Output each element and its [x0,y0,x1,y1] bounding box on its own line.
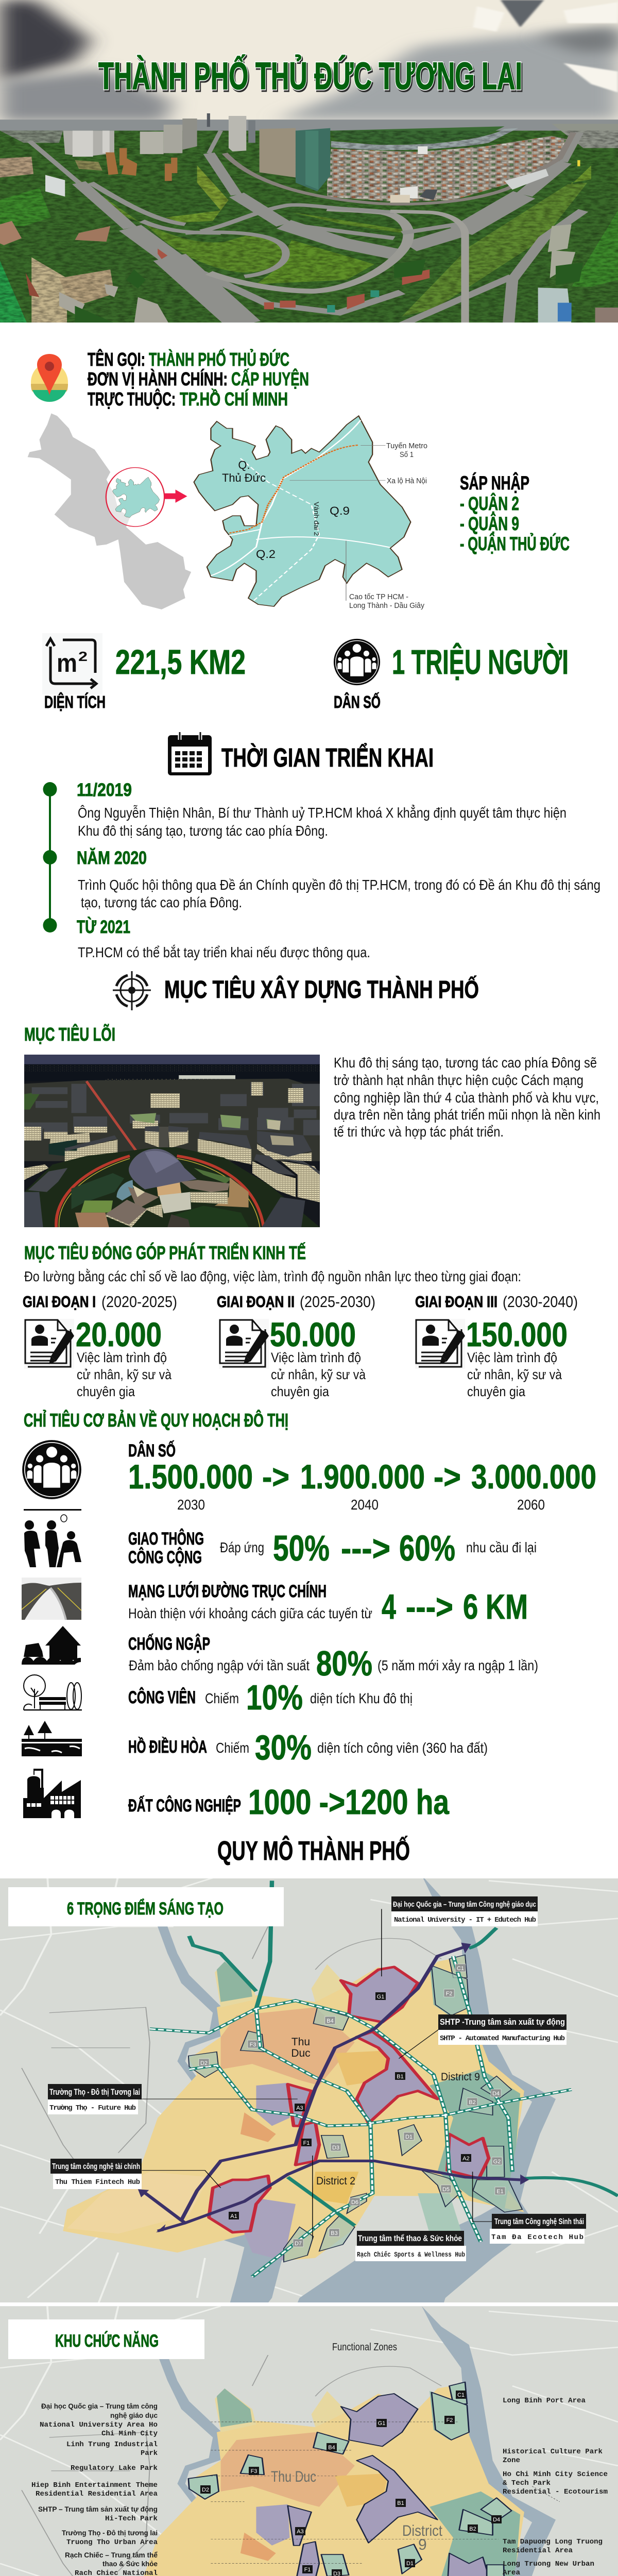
milestone 2021: TỪ 2021 [77,917,130,937]
target: public transport: CÔNG CỘNG [128,1547,202,1567]
target: flood control: 80% [316,1644,372,1683]
icon: park [24,1675,82,1710]
sandy lots [0,157,33,178]
heading: city scale: QUY MÔ THÀNH PHỐ [217,1836,410,1866]
callout: Rach Chiec: Trung tâm thể thao & Sức khỏe [358,2233,462,2243]
right labels: Tam Dapuong Long Truong [503,2538,603,2546]
leader lines [211,2422,560,2576]
map labels: Q.2 [256,548,276,561]
panel: phase I: 20.000 [76,1315,162,1353]
icon: calendar [168,732,212,775]
zone code tags: B4 [327,2018,334,2024]
zone code tags: A1 [230,2213,237,2219]
zone code tags: D4 [493,2517,500,2523]
right labels: Residential Area [503,2547,573,2555]
callout: Tam Da [490,2214,586,2244]
panel: phase I: GIAI ĐOẠN I [23,1293,96,1311]
milestone 2020 [77,848,600,910]
milestone 2020: NĂM 2020 [77,848,147,868]
icon: map pin [31,354,68,402]
map captions: District [402,2522,443,2539]
target: regulating lakes: 30% [255,1728,312,1767]
merged districts list: - QUẬN THỦ ĐỨC [460,533,570,554]
map labels: Long Thành - Dầu Giây [349,601,424,610]
panel: phase III: cử nhân, kỹ sư và [467,1367,562,1382]
target: industrial land [128,1783,450,1822]
right labels: Zone [503,2456,520,2465]
highlight circle [106,468,164,527]
stat: population: DÂN SỐ [334,692,381,711]
zone code tags: D5 [442,2187,450,2193]
target: regulating lakes: Chiếm [216,1740,249,1756]
map labels: Cao tốc TP HCM - [349,592,408,601]
dense city [327,136,568,202]
zone code tags: A2 [462,2156,470,2162]
core goal paragraph [334,1055,600,1140]
left labels: Truong Tho Urban Area [66,2538,158,2547]
zone code tags: B2 [469,2526,476,2532]
zone code tags: D1 [406,2561,414,2567]
left labels: Residential Residential Area [36,2490,158,2498]
night render of the innovation city [24,1055,320,1227]
city facts: ĐƠN VỊ HÀNH CHÍNH: [88,368,228,389]
callout: Truong Tho: Trường Thọ - Future Hub [49,2104,136,2112]
low-rise buildings [26,273,40,297]
target: industrial land: ĐẤT CÔNG NGHIỆP [128,1795,241,1816]
callout: Fintech [50,2159,142,2189]
towers [63,131,114,157]
zone code tags: G2 [493,2159,501,2165]
left labels: Đại học Quốc gia – Trung tâm công [41,2402,158,2410]
merged districts list: - QUẬN 2 [460,493,519,514]
merged districts list [460,472,570,554]
map labels: Q.9 [330,504,350,517]
map labels: Thủ Đức [222,471,266,484]
map title: 6 hubs [8,1887,284,1926]
right labels [501,2397,610,2576]
zone code tags [200,2391,506,2576]
zone code tags: A3 [296,2105,303,2111]
icon: public transport [24,1509,81,1567]
zone code tags: D2 [202,2487,209,2493]
right labels: & Tech Park [503,2479,551,2487]
target: main road network [128,1582,528,1626]
right labels: Historical Culture Park [503,2448,603,2456]
left labels: thao & Sức khỏe [102,2560,158,2568]
mini district shape [112,477,160,517]
panel: phase II: 50.000 [270,1315,356,1353]
panel: phase III: Việc làm trình độ [467,1350,557,1365]
target: regulating lakes: diện tích công viên (360 ha đất) [317,1740,488,1756]
target: population: 1.900.000 [300,1458,425,1496]
zone code tags: B3 [331,2230,338,2236]
green areas [0,188,618,287]
hero aerial photo of the city [0,0,618,325]
province silhouette [28,413,191,609]
city facts: THÀNH PHỐ THỦ ĐỨC [149,348,289,370]
panel: phase II [217,1293,375,1399]
timeline [43,780,600,960]
map: functional zones [0,2306,618,2576]
map title: functional zones [8,2319,204,2359]
city facts: TP.HỒ CHÍ MINH [180,388,288,410]
zone code tags: B4 [328,2445,335,2451]
panel: phase III: (2030-2040) [503,1293,578,1311]
callout: Fintech: Trung tâm công nghệ tài chính [52,2162,140,2171]
callout: National University: National University - IT + Edutech Hub [394,1916,536,1924]
zone code tags: A3 [297,2529,304,2535]
zone code tags: E1 [496,2189,504,2195]
target: population: 3.000.000 [471,1458,596,1496]
panel: phase III: chuyên gia [467,1384,526,1399]
target: population: DÂN SỐ [128,1440,176,1461]
panel: phase II: GIAI ĐOẠN II [217,1293,295,1311]
river and island [331,128,518,150]
city facts: CẤP HUYỆN [231,368,309,389]
callout: Rach Chiec: Rạch Chiếc Sports & Wellness Hub [357,2250,465,2259]
zone code tags: B1 [397,2500,404,2506]
stat: area [44,643,246,711]
callout: Tam Da: Tam Đa Ecotech Hub [491,2233,583,2242]
target: population: 2040 [351,1497,379,1513]
zone code tags: D2 [200,2060,208,2066]
target: population: 2060 [517,1497,545,1513]
icon: factory [23,1769,81,1818]
secondary zones [188,1955,522,2262]
icon: flood protection [22,1626,81,1665]
zone code tags: F1 [303,2140,310,2146]
right labels: Residential - Ecotourism [503,2488,608,2496]
right labels: Ho Chi Minh City Science [503,2470,608,2479]
red arrow [164,489,187,503]
target: main road network: 4 [382,1587,396,1626]
city facts: TRỰC THUỘC: [88,388,176,410]
panel: phase II: chuyên gia [271,1384,330,1399]
target: population: 2030 [177,1497,205,1513]
callout: Truong Tho: Trường Thọ - Đô thị Tương lai [49,2087,140,2097]
panel: phase I: chuyên gia [77,1384,135,1399]
map title: functional zones: KHU CHỨC NĂNG [55,2331,159,2351]
district labels [291,2036,480,2187]
zone code tags: G1 [378,2420,385,2427]
left labels: Chi Minh City [101,2430,158,2438]
roads [211,420,390,602]
target: population: 1.500.000 [128,1458,253,1496]
zone code tags: B1 [397,2074,404,2080]
icon: target [113,971,151,1010]
callout: SHTP: SHTP - Automated Manufacturing Hub [440,2035,565,2043]
main zones [209,2394,489,2576]
heading: core goal: MỤC TIÊU LÕI [24,1023,115,1045]
left labels: SHTP – Trung tâm sản xuất tự động [38,2505,158,2513]
district labels: Thu [291,2036,310,2048]
stat: population [334,643,569,711]
target: flood control [128,1634,538,1683]
target: regulating lakes [128,1728,488,1767]
right labels: Long Binh Port Area [503,2397,586,2405]
milestone 2019: 11/2019 [77,780,132,800]
panel: phase II: (2025-2030) [300,1293,375,1311]
target: flood control: CHỐNG NGẬP [128,1634,210,1654]
district labels: District 9 [441,2071,480,2083]
map: 6 innovation hubs [0,1875,618,2336]
callout: Truong Tho [48,2084,142,2114]
left labels: Hi-Tech Park [105,2515,158,2523]
callout: Rach Chiec [355,2231,466,2261]
target: regulating lakes: HỒ ĐIỀU HÒA [128,1737,207,1757]
callout: SHTP [438,2014,566,2045]
callout: National University: Đại học Quốc gia – Trung tâm Công nghệ giáo dục [393,1900,536,1909]
target: parks [128,1678,413,1717]
left labels: Trường Thọ - Đô thị tương lai [62,2529,158,2537]
target: public transport: ---> [341,1528,390,1568]
map labels: Tuyến Metro [386,442,427,450]
target: flood control: Đảm bảo chống ngập với tần suất [129,1657,310,1673]
purple metro line [142,1945,520,2231]
target: main road network: 6 KM [463,1587,528,1626]
map captions: Thu Duc [271,2468,316,2485]
target: population: -> [262,1458,289,1496]
milestone 2020: tạo, tương tác cao phía Đông. [81,894,242,910]
heading: goals: MỤC TIÊU XÂY DỰNG THÀNH PHỐ [164,975,479,1004]
map labels: Số 1 [400,450,414,459]
icon: population [334,639,380,685]
left labels: Regulatory Lake Park [71,2464,158,2472]
horizon skyline [0,120,618,132]
heading: urban planning targets: CHỈ TIÊU CƠ BẢN VỀ QUY HOẠCH ĐÔ THỊ [24,1409,288,1431]
panel: phase II: cử nhân, kỹ sư và [271,1367,366,1382]
location map [28,413,427,610]
target: main road network: MẠNG LƯỚI ĐƯỜNG TRỤC CHÍNH [128,1582,327,1601]
secondary zones [188,2382,522,2576]
left labels: Rạch Chiếc – Trung tâm thể [65,2551,158,2559]
zone code tags [199,1964,505,2247]
panel: phase I: Việc làm trình độ [77,1350,167,1365]
target: parks: CÔNG VIÊN [128,1687,196,1707]
hub zones with red outline [209,1967,489,2232]
milestone 2021: TP.HCM có thể bắt tay triển khai nếu được thông qua. [78,944,370,960]
map labels: Xa lộ Hà Nội [387,477,427,485]
zone code tags: C1 [457,2392,465,2398]
left labels: Linh Trung Industrial [66,2441,158,2449]
target: public transport: nhu cầu đi lại [466,1539,537,1555]
district labels: District 2 [316,2175,355,2187]
callout: SHTP: SHTP -Trung tâm sản xuất tự động [440,2017,565,2027]
callout: National University [391,1896,538,1926]
zone code tags: F2 [447,2417,453,2424]
target: parks: diện tích Khu đô thị [310,1690,413,1706]
target: population: -> [434,1458,461,1496]
zone code tags: D7 [295,2241,302,2247]
zone code tags: C1 [457,1965,464,1972]
target: public transport: GIAO THÔNG [128,1529,204,1549]
merged districts list: - QUẬN 9 [460,513,519,534]
heading: timeline: THỜI GIAN TRIỂN KHAI [221,742,434,772]
panel: phase I: cử nhân, kỹ sư và [77,1367,172,1382]
map labels: Q. [238,459,250,471]
panel: phase II: Việc làm trình độ [271,1350,361,1365]
icon: area m2: 2 [78,649,88,664]
map captions: 9 [418,2536,427,2553]
zone code tags: D3 [332,2145,339,2151]
icon: area m2: m [57,649,77,677]
callout: Tam Da: Trung tâm Công nghệ Sinh thái [494,2217,584,2226]
icon: area m2 [42,633,102,694]
map labels [222,442,427,610]
city facts: TÊN GỌI: [88,348,145,370]
foliage texture [0,131,618,325]
callout: Fintech: Thu Thiem Fintech Hub [55,2178,140,2187]
target: main road network: Hoàn thiện với khoảng cách giữa các tuyến từ [128,1605,372,1621]
left labels: National University Area Ho [40,2421,158,2429]
left labels [31,2402,239,2576]
target: parks: 10% [246,1678,303,1717]
panel: phase III: GIAI ĐOẠN III [415,1293,497,1311]
road network [29,131,583,325]
target: main road network: ---> [406,1587,453,1626]
target: public transport: 60% [399,1528,455,1568]
district labels: Duc [291,2047,311,2059]
merged districts list: SÁP NHẬP [460,472,529,494]
target: industrial land: 1000 ->1200 ha [248,1783,450,1822]
zone code tags: D1 [405,2134,413,2140]
milestone 2019 [77,780,566,839]
panel: phase I: (2020-2025) [101,1293,177,1311]
city facts [88,348,309,410]
stat: area: 221,5 KM2 [115,643,246,682]
map title: 6 hubs: 6 TRỌNG ĐIỂM SÁNG TẠO [67,1899,224,1919]
left labels: nghệ giáo dục [110,2411,158,2419]
panel: phase III: 150.000 [466,1315,568,1353]
zone code tags: G1 [377,1994,384,2000]
zone code tags: F2 [446,1991,452,1997]
panel: phase III [415,1293,578,1399]
target: population [128,1440,596,1513]
target: public transport: 50% [273,1528,330,1568]
zone code tags: D6 [351,2199,358,2206]
zone code tags: F3 [250,2042,256,2048]
map captions [271,2342,443,2576]
zone code tags: F1 [304,2567,311,2573]
map labels: Vành đai 2 [313,502,320,536]
district map [194,416,410,606]
heading: economic goal: MỤC TIÊU ĐÓNG GÓP PHÁT TRIỂN KINH TẾ [24,1242,306,1263]
target: public transport: Đáp ứng [220,1539,264,1555]
stat: area: DIỆN TÍCH [44,692,106,711]
panel: phase I [23,1293,177,1399]
core goal paragraph: tế tri thức và hợp tác phát triển. [334,1124,504,1140]
map captions: Functional Zones [332,2342,397,2353]
right labels: Long Truong New Urban [503,2560,594,2568]
image: highway [22,1578,81,1620]
zone code tags: F3 [251,2468,257,2475]
zone code tags: D4 [492,2091,500,2097]
left labels: Hiep Binh Entertainment Theme [31,2481,158,2489]
economic goal intro: Đo lường bằng các chỉ số về lao động, việc làm, trình độ nguồn nhân lực theo từng giai đoạn: [24,1268,521,1284]
target: public transport [128,1528,537,1568]
green transit routes [150,1880,618,2277]
milestone 2021 [77,917,370,960]
target: flood control: (5 năm mới xảy ra ngập 1 lần) [377,1657,538,1673]
zone code tags: B2 [469,2099,476,2106]
target: parks: Chiếm [205,1690,239,1706]
left labels: Park [141,2449,158,2458]
icon: population large [22,1440,81,1499]
icon: lake [22,1721,82,1756]
milestone 2019: Khu đô thị sáng tạo, tương tác cao phía Đông. [78,823,328,839]
